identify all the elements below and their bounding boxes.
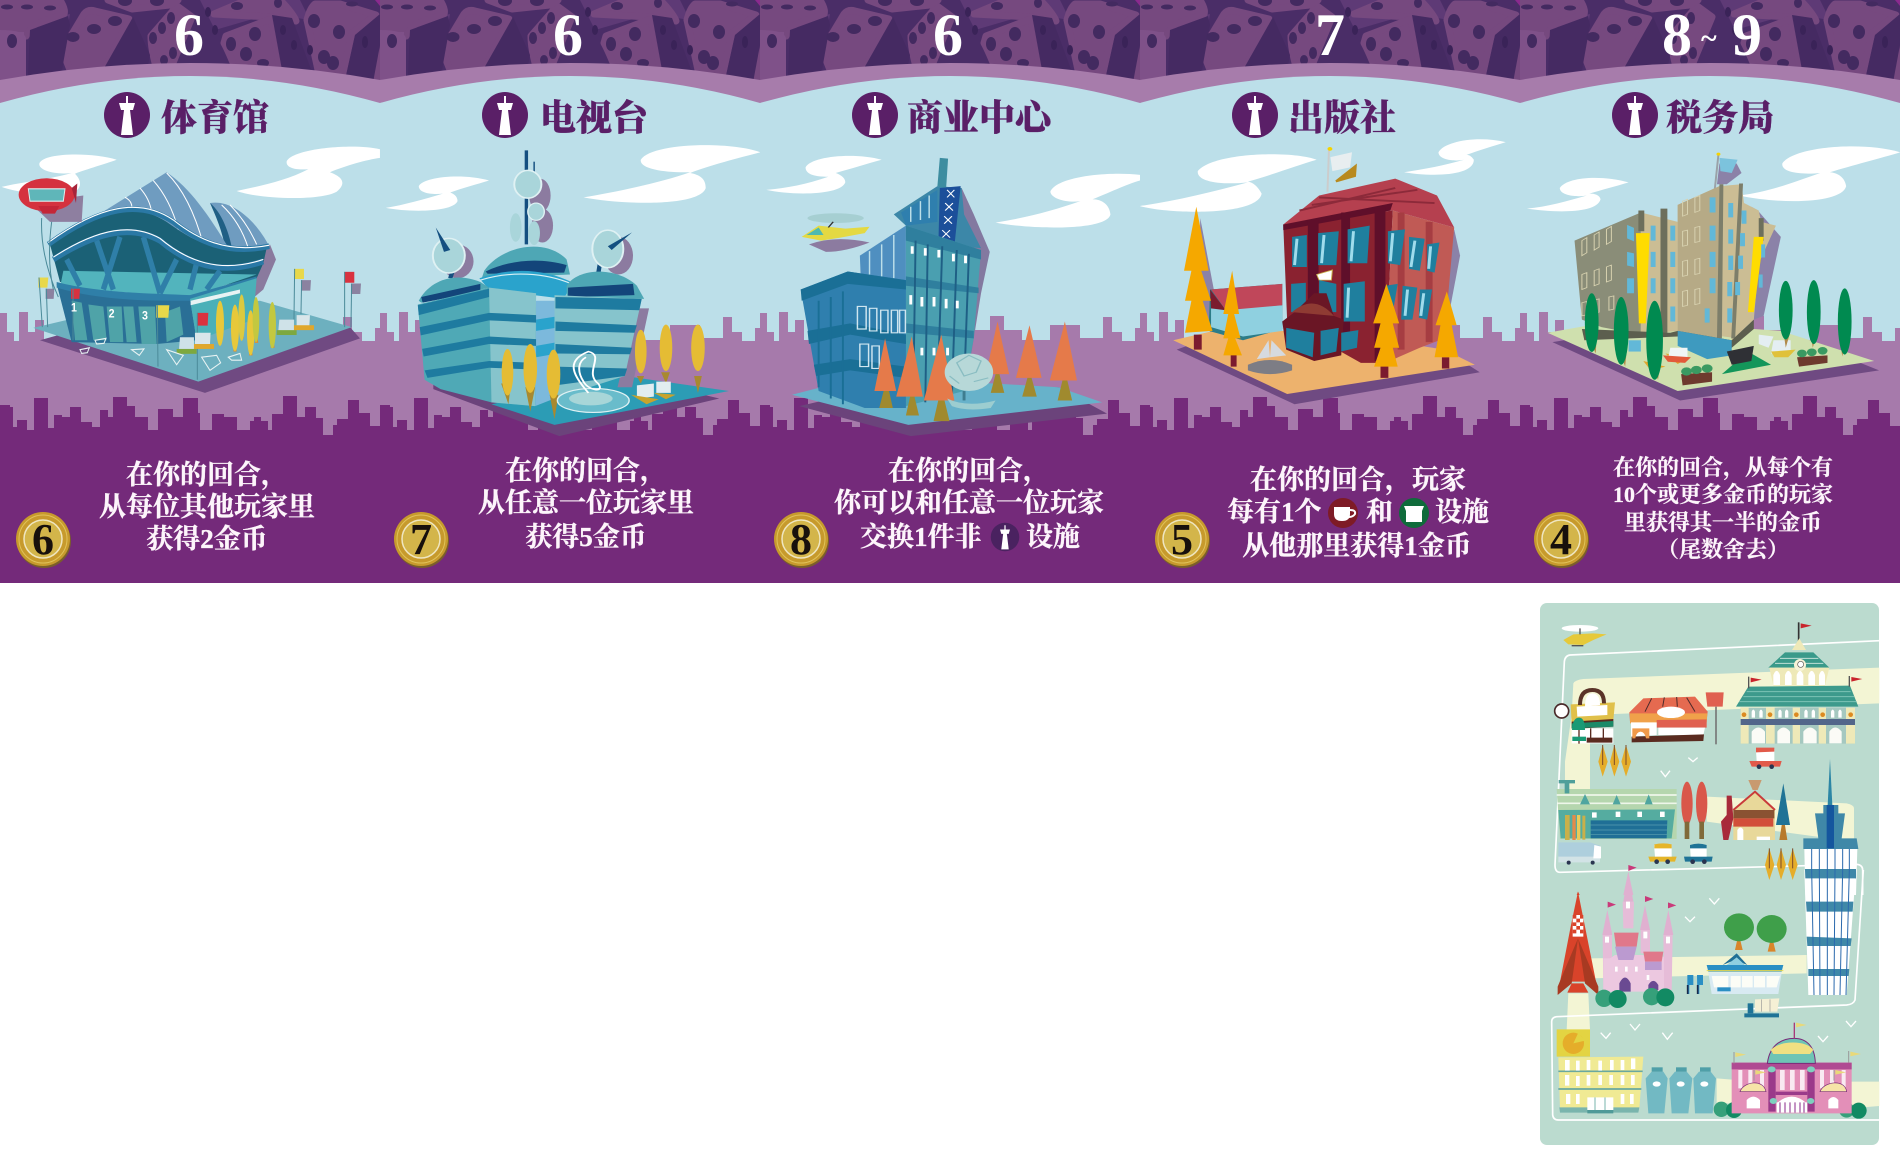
heading: stadium: 体育馆 <box>161 90 269 141</box>
effect text: 获得5金币 <box>525 522 647 552</box>
effect text: （尾数舍去） <box>1657 537 1789 562</box>
panel: card 1 stadium <box>0 0 388 583</box>
effect text: 设施 <box>1026 522 1080 552</box>
coin: activation cost 6: 6 <box>32 515 54 564</box>
dice number 6: 6 <box>553 2 583 68</box>
heading: business centre: 商业中心 <box>907 90 1057 141</box>
icon: tower badge <box>104 92 150 138</box>
panel: card 4 publishing house <box>1130 0 1528 583</box>
effect text: 在你的回合， <box>126 460 288 491</box>
illustration: stadium with blimp: 3 <box>142 310 148 323</box>
icon: tower badge <box>482 92 528 138</box>
coin: activation cost 7 <box>394 512 449 568</box>
dice range 8 to 9: ~ <box>1701 22 1717 55</box>
map lower half: rocket, castle, shop, pizza, dome <box>1552 870 1879 1120</box>
coin: activation cost 4: 4 <box>1550 515 1572 564</box>
illustration: stadium with blimp: 2 <box>109 308 115 321</box>
illustration: TV station with dishes <box>386 145 760 436</box>
coin: activation cost 5: 5 <box>1171 515 1193 564</box>
effect text: 从他那里获得1金币 <box>1242 531 1472 561</box>
panel: card 2 TV station <box>380 0 768 583</box>
effect text: 和 <box>1366 497 1393 527</box>
dice number 7: 7 <box>1315 2 1345 68</box>
heading: TV station: 电视台 <box>540 90 651 141</box>
effect text: 里获得其一半的金币 <box>1624 510 1822 535</box>
illustration: stadium with blimp: 1 <box>71 302 77 315</box>
panel: card 5 tax office <box>1520 0 1900 583</box>
effect text: 每有1个 <box>1227 497 1322 527</box>
effect text: 你可以和任意一位玩家 <box>834 487 1104 518</box>
icon: tower badge <box>852 92 898 138</box>
effect text: 在你的回合， <box>888 456 1050 487</box>
dice number 6: 6 <box>933 2 963 68</box>
panel: town map card <box>1540 603 1879 1145</box>
icon: red cup badge <box>1328 498 1358 528</box>
effect text: 从任意一位玩家里 <box>478 487 694 518</box>
effect text: 从每位其他玩家里 <box>99 492 315 522</box>
effect text: 在你的回合，从每个有 <box>1613 455 1833 481</box>
effect text: 10个或更多金币的玩家 <box>1613 482 1833 507</box>
map upper half: roads and buildings <box>1555 622 1879 895</box>
heading: tax office: 税务局 <box>1666 90 1774 141</box>
illustration: tax office with green trees <box>1527 146 1900 400</box>
illustration: stadium with blimp <box>2 147 380 393</box>
heading: publishing house: 出版社 <box>1288 90 1396 141</box>
effect text <box>478 456 694 552</box>
effect text <box>1613 455 1833 562</box>
illustration: business tower with helicopter <box>766 156 1140 436</box>
effect text <box>834 456 1104 552</box>
effect text: 在你的回合，玩家 <box>1250 465 1466 496</box>
coin: activation cost 8: 8 <box>790 515 812 564</box>
dice range 8 to 9: 9 <box>1732 2 1762 68</box>
icon: green shop badge <box>1399 498 1429 528</box>
effect text <box>1227 465 1489 561</box>
icon: tower badge <box>1612 92 1658 138</box>
illustration: red publishing house with pines <box>1130 139 1506 404</box>
effect text: 设施 <box>1435 497 1489 527</box>
effect text: 在你的回合， <box>505 456 667 487</box>
coin: activation cost 4 <box>1534 512 1589 568</box>
coin: activation cost 6 <box>16 512 71 568</box>
effect text <box>99 460 315 554</box>
effect text: 交换1件非 <box>860 522 982 552</box>
icon: inline tower badge <box>991 523 1019 551</box>
effect text: 获得2金币 <box>146 524 268 554</box>
coin: activation cost 8 <box>774 512 829 568</box>
panel: card 3 business centre <box>760 0 1148 583</box>
coin: activation cost 7: 7 <box>410 515 432 564</box>
dice number 6: 6 <box>174 2 204 68</box>
icon: tower badge <box>1232 92 1278 138</box>
coin: activation cost 5 <box>1155 512 1210 568</box>
dice range 8 to 9: 8 <box>1662 2 1692 68</box>
